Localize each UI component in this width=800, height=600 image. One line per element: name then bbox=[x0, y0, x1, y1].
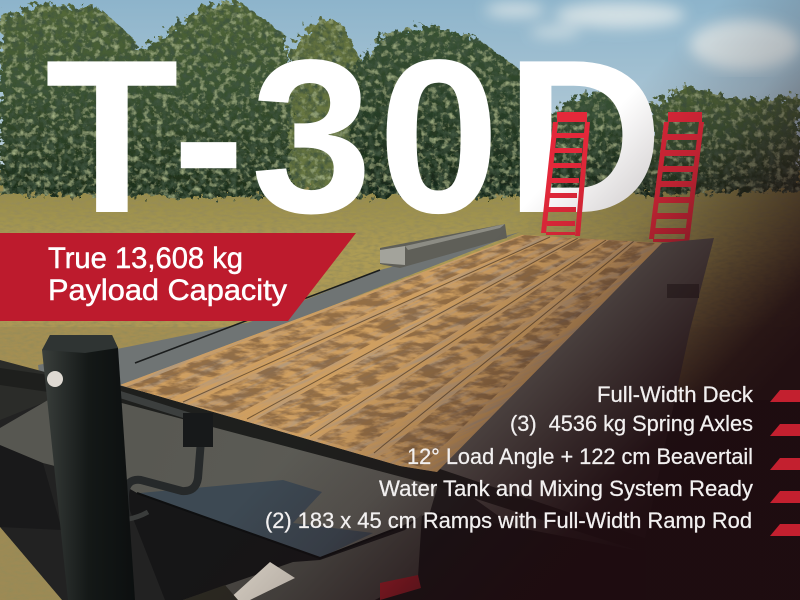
feature: deck: Full-Width Deck bbox=[597, 382, 753, 407]
feature: axles: (3) 4536 kg Spring Axles bbox=[510, 411, 753, 436]
red payload banner bbox=[0, 233, 356, 321]
red loading ramps bbox=[541, 112, 704, 243]
right side rail bbox=[437, 238, 714, 560]
handle bracket bbox=[183, 413, 213, 447]
banner text: True 13,608 kg bbox=[48, 242, 243, 275]
wood deck bbox=[120, 235, 662, 472]
red list markers bbox=[770, 390, 800, 536]
worn plank bands bbox=[126, 235, 655, 467]
feature list bbox=[265, 382, 753, 533]
red payload banner: Payload Capacity bbox=[48, 274, 287, 307]
jack stand and handle bbox=[42, 335, 213, 600]
crank handle bbox=[125, 440, 201, 520]
upper left deck strip bbox=[38, 232, 520, 395]
jack post bbox=[42, 335, 135, 600]
handle rod bbox=[112, 392, 195, 418]
right ramp bbox=[649, 112, 704, 243]
red reflector bbox=[380, 575, 421, 600]
plank lines bbox=[183, 237, 634, 453]
large title: T-30D bbox=[45, 15, 669, 259]
wood grain bbox=[120, 235, 662, 472]
feature: load angle: 12° Load Angle + 122 cm Beavertail bbox=[407, 444, 753, 469]
feature: ramps: (2) 183 x 45 cm Ramps with Full-Width Ramp Rod bbox=[265, 508, 752, 533]
sky bbox=[0, 0, 800, 200]
lower black frame bbox=[0, 445, 62, 530]
safety label bbox=[228, 562, 295, 600]
feature: water tank: Water Tank and Mixing System Ready bbox=[379, 476, 753, 501]
left ramp bbox=[541, 112, 590, 236]
clouds bbox=[485, 2, 800, 70]
tree line bbox=[0, 2, 800, 197]
field bbox=[0, 170, 800, 400]
grass patch lower left bbox=[0, 327, 800, 400]
fender tag bbox=[667, 284, 699, 298]
dark frame rail bbox=[0, 368, 645, 553]
handle hook bbox=[108, 512, 148, 520]
trailer body bbox=[0, 224, 714, 600]
left dark frame end bbox=[0, 360, 50, 420]
main gray plate bbox=[0, 390, 440, 558]
jack sticker bbox=[47, 371, 63, 387]
lower gray band bbox=[183, 514, 422, 600]
lid shadow bbox=[140, 480, 373, 558]
fender box bbox=[380, 224, 507, 268]
